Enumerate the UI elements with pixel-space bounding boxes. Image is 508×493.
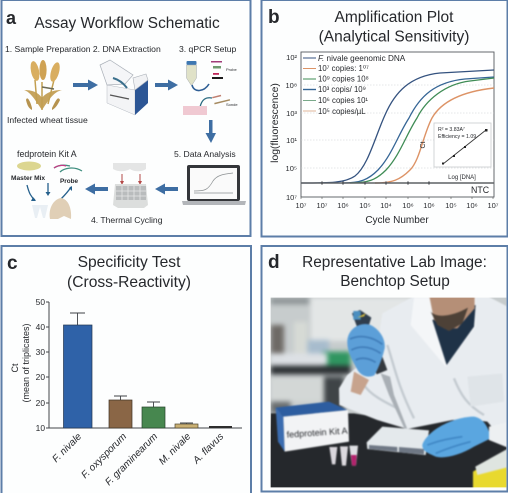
inset standard curve: R² = 3.83A⁷ bbox=[438, 127, 465, 133]
y axis ticks: 10³ bbox=[286, 109, 297, 118]
inset standard curve: Log [DNA] bbox=[448, 175, 476, 181]
photo: scientist pipetting at bench bbox=[267, 294, 508, 491]
NTC line bbox=[301, 182, 494, 195]
legend: F. nivale geenomic DNA bbox=[318, 54, 406, 63]
error bars bbox=[70, 313, 193, 424]
x axis ticks: 10⁶ bbox=[337, 201, 349, 210]
x axis ticks: 10⁴ bbox=[380, 201, 392, 210]
legend: 10⁵ copies/µL bbox=[318, 107, 366, 116]
bar chart: 20 bbox=[36, 398, 45, 408]
icon: qPCR setup reagents: Sonde bbox=[226, 102, 238, 107]
yellow tip box bbox=[472, 466, 506, 488]
heading: representative lab image bbox=[302, 254, 487, 290]
step labels top row bbox=[5, 44, 237, 54]
panel d: representative lab image bbox=[262, 246, 508, 492]
curves bbox=[301, 70, 494, 183]
y axis ticks: 10⁵ bbox=[286, 164, 297, 173]
icon: kit reagents bbox=[11, 162, 82, 219]
icon: qPCR setup reagents: Probe bbox=[226, 67, 237, 72]
heading: specificity test: (Cross-Reactivity) bbox=[67, 274, 191, 291]
inset standard curve bbox=[420, 123, 491, 181]
arm bbox=[351, 372, 369, 395]
heading: representative lab image: Benchtop Setup bbox=[340, 273, 450, 290]
bar chart: 20 bbox=[36, 372, 45, 382]
x axis ticks: 10⁷ bbox=[487, 201, 499, 210]
arrow: step 5 to 4 bbox=[155, 184, 178, 194]
x axis labels: F. nivale bbox=[51, 431, 84, 465]
icon: qPCR setup reagents bbox=[183, 61, 238, 115]
lower glove bbox=[422, 417, 491, 457]
x axis ticks bbox=[295, 201, 499, 210]
heading: Assay Workflow Schematic: Assay Workflow Schematic bbox=[34, 15, 220, 32]
lab background bbox=[271, 298, 414, 413]
y axis ticks: 10⁷ bbox=[286, 193, 297, 202]
legend: 10⁷ copies: 1⁰⁷ bbox=[318, 64, 369, 73]
icon: wheat bbox=[24, 60, 62, 110]
x axis labels bbox=[51, 431, 226, 488]
legend bbox=[303, 54, 406, 116]
x axis ticks: 10⁷ bbox=[295, 201, 307, 210]
bar chart: 10 bbox=[36, 423, 45, 433]
x axis labels: M. nivale bbox=[157, 431, 193, 467]
x axis ticks: 10⁶ bbox=[466, 201, 478, 210]
legend: 10⁶ copies 10¹ bbox=[318, 96, 368, 105]
x axis ticks: 10⁵ bbox=[359, 201, 371, 210]
heading: amplification plot: Amplification Plot bbox=[335, 9, 454, 26]
x axis labels: F. oxysporum bbox=[79, 431, 129, 481]
panel letter c: c bbox=[7, 253, 18, 274]
bars bbox=[64, 325, 92, 428]
step labels top row: 1. Sample Preparation 2. DNA Extraction bbox=[5, 44, 161, 54]
NTC line: NTC bbox=[471, 185, 490, 195]
pipette plate bbox=[367, 427, 429, 455]
legend: 10³ copis/ 10⁹ bbox=[318, 85, 366, 94]
y axis title: log(fluorescence) bbox=[270, 83, 281, 163]
heading: amplification plot: (Analytical Sensitivity) bbox=[319, 28, 469, 46]
panel a: assay workflow schematic bbox=[2, 0, 250, 236]
arrow: step 3 to 5 bbox=[206, 120, 216, 143]
y axis ticks bbox=[285, 53, 297, 202]
arrow: step 4 to kit bbox=[85, 184, 108, 194]
line chart bbox=[270, 52, 499, 226]
panel letter b: b bbox=[268, 7, 280, 28]
y axis title: Ct bbox=[10, 363, 20, 372]
x axis title: Cycle Number bbox=[365, 215, 429, 226]
bar chart bbox=[10, 297, 242, 488]
x axis ticks: 10⁶ bbox=[402, 201, 414, 210]
arrow: step 1 to 2 bbox=[73, 80, 98, 90]
icon: kit reagents: Master Mix bbox=[11, 175, 45, 182]
y axis ticks: 10⁸ bbox=[285, 81, 297, 90]
y axis bbox=[49, 302, 242, 428]
y axis ticks: 10¹ bbox=[286, 136, 297, 145]
bench bbox=[267, 413, 508, 491]
bar chart: 50 bbox=[36, 297, 45, 307]
kit label: fedprotein Kit A bbox=[286, 426, 348, 440]
bar chart: 30 bbox=[36, 347, 45, 357]
pipette bbox=[352, 310, 371, 328]
x axis ticks: 10⁶ bbox=[423, 201, 435, 210]
y axis title: (mean of triplicates) bbox=[21, 323, 31, 403]
panel letter d: d bbox=[268, 252, 280, 273]
label: data analysis: 5. Data Analysis bbox=[174, 149, 236, 159]
x axis labels: A. flavus bbox=[191, 431, 226, 467]
step labels top row: 3. qPCR Setup bbox=[179, 44, 237, 54]
x axis ticks: 10⁵ bbox=[445, 201, 457, 210]
heading: amplification plot bbox=[319, 9, 469, 46]
lab coat bbox=[338, 298, 506, 430]
icon: DNA extraction box bbox=[100, 60, 148, 115]
heading: specificity test: Specificity Test bbox=[78, 254, 181, 271]
bar chart: 40 bbox=[36, 322, 45, 332]
upper glove bbox=[347, 324, 385, 377]
arrow: step 2 to 3 bbox=[155, 80, 178, 90]
panel letter a: a bbox=[6, 8, 17, 28]
legend: 10⁹ copies 10⁸ bbox=[318, 74, 369, 84]
inset standard curve: Efficiency = 1.09 bbox=[438, 134, 476, 140]
caption: infected wheat tissue: Infected wheat tissue bbox=[7, 115, 88, 125]
y axis title bbox=[10, 323, 31, 403]
tubes bbox=[329, 447, 337, 464]
panel c: specificity test bbox=[2, 246, 251, 493]
x axis labels: F. graminearum bbox=[103, 431, 160, 488]
icon: laptop with amplification curve bbox=[182, 165, 246, 205]
kit box bbox=[276, 402, 347, 417]
label: fedprotein kit A: fedprotein Kit A bbox=[17, 149, 77, 159]
icon: thermal cycler bbox=[113, 163, 148, 208]
y axis ticks: 10² bbox=[286, 53, 297, 62]
inset standard curve: Ct bbox=[420, 141, 427, 148]
heading: representative lab image: Representative Lab Image: bbox=[302, 254, 487, 271]
x axis ticks: 10⁷ bbox=[316, 201, 328, 210]
heading: specificity test bbox=[67, 254, 191, 291]
label: thermal cycling: 4. Thermal Cycling bbox=[91, 215, 163, 225]
icon: kit reagents: Probe bbox=[60, 178, 79, 185]
face bbox=[429, 294, 475, 328]
panel b: amplification plot bbox=[262, 0, 508, 236]
